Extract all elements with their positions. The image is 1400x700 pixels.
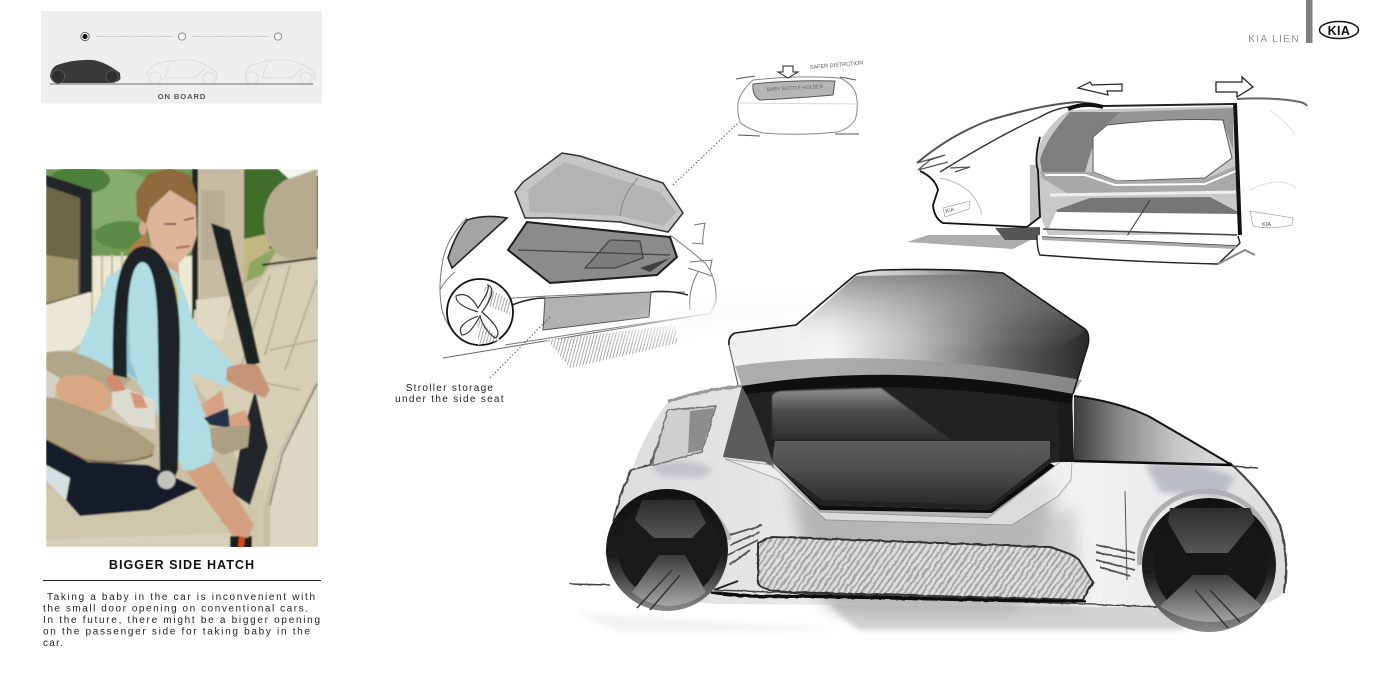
rear window bbox=[652, 406, 716, 465]
rocker storage panel bbox=[758, 537, 1093, 600]
trees bbox=[46, 169, 206, 259]
photo: mother fastening baby carrier on rear seat bbox=[46, 166, 320, 548]
carrier canopy bbox=[46, 398, 155, 462]
text block: hatch description: on the passenger side for taking baby in the bbox=[43, 626, 311, 638]
text block: hatch description bbox=[43, 592, 321, 649]
rear window bbox=[448, 216, 507, 268]
badge sketches: KIA bbox=[945, 207, 955, 215]
sweater bbox=[75, 261, 234, 470]
hands and arm bbox=[187, 461, 254, 538]
ground shading bbox=[547, 325, 678, 368]
logo: KIA oval: KIA bbox=[1328, 24, 1350, 38]
handwritten note: SAFER DISTRCTION bbox=[810, 60, 863, 71]
icon: active car silhouette bbox=[50, 60, 120, 83]
text block: hatch description: Taking a baby in the car is inconvenient with bbox=[47, 592, 316, 603]
pillar bbox=[196, 169, 246, 276]
baby bbox=[46, 370, 60, 398]
sketch: hatch open, rear three-quarter view bbox=[440, 153, 716, 368]
callout line: hatch to console bbox=[673, 123, 738, 185]
car door frame bbox=[46, 175, 92, 305]
side sketch marks bbox=[728, 525, 1135, 576]
sketch: interior rear view mirror / overhead console bbox=[736, 60, 863, 136]
neck bbox=[149, 240, 180, 279]
hair strand bbox=[128, 232, 150, 254]
front wheel bbox=[1140, 491, 1276, 632]
necklace strap bbox=[173, 273, 178, 300]
open hatch panel bbox=[515, 153, 683, 232]
pillar shadow line bbox=[1125, 491, 1127, 580]
hatch shadow on body bbox=[790, 470, 1055, 610]
rear sketch lines bbox=[570, 386, 1286, 610]
hair bbox=[136, 168, 197, 224]
soft background haze bbox=[600, 300, 1000, 340]
bolster bbox=[270, 385, 317, 547]
carrier base bbox=[46, 440, 198, 516]
stage label: ON BOARD bbox=[158, 92, 206, 101]
sketch: interior rear view mirror / overhead console: BABY BOTTLE HOLDER bbox=[767, 84, 824, 93]
wheel bbox=[447, 279, 513, 345]
car body bbox=[609, 385, 1286, 608]
icon: inactive car outline 2 bbox=[147, 60, 217, 84]
sketch: open sliding doors, side view: KIA bbox=[1262, 222, 1271, 228]
ground shadow bbox=[907, 235, 1040, 249]
seat back bbox=[190, 258, 317, 520]
brand header bbox=[1248, 0, 1358, 45]
sliding step bbox=[1037, 235, 1240, 264]
open hatch bbox=[729, 269, 1089, 394]
text block: hatch description: car. bbox=[43, 638, 64, 649]
door pillar bbox=[1235, 103, 1240, 235]
hatch opening bbox=[508, 222, 677, 283]
side glass bbox=[723, 379, 1074, 510]
white lower wall bbox=[1048, 212, 1240, 234]
console outline bbox=[738, 77, 857, 134]
ground shadow bbox=[830, 600, 1185, 630]
arrow: insertion direction bbox=[778, 66, 798, 78]
stage dots and connectors bbox=[81, 32, 282, 41]
panel: journey stage indicator bbox=[41, 11, 322, 104]
seat belt bbox=[211, 223, 260, 366]
callout line: stroller storage bbox=[490, 317, 550, 378]
sketch: main rendered car with hatch open bbox=[570, 269, 1286, 632]
sketch: open sliding doors, side view bbox=[907, 77, 1307, 264]
rear wheel bbox=[606, 489, 729, 611]
fence bbox=[90, 254, 194, 316]
rear roof bbox=[1237, 98, 1307, 106]
interior window bbox=[1093, 120, 1232, 181]
headrest bbox=[264, 169, 317, 258]
annotation: stroller storage bbox=[395, 383, 505, 405]
interior shaded wall bbox=[1037, 106, 1240, 235]
icon: inactive car outline 3 bbox=[245, 60, 315, 84]
model name: KIA LIEN bbox=[1248, 34, 1300, 45]
seat cushion bbox=[46, 490, 264, 547]
heading: bigger side hatch: BIGGER SIDE HATCH bbox=[109, 558, 255, 572]
carrier tan shell bbox=[46, 351, 132, 398]
annotation: stroller storage: Stroller storage bbox=[406, 383, 494, 394]
annotation: stroller storage: under the side seat bbox=[395, 394, 505, 405]
body lines bbox=[440, 218, 716, 358]
face bbox=[146, 190, 197, 264]
storage panel bbox=[543, 292, 651, 330]
badge sketches bbox=[943, 201, 970, 217]
seat bands bbox=[1040, 165, 1238, 195]
arrow: door slides right bbox=[1216, 77, 1253, 97]
front glass bbox=[1074, 397, 1230, 464]
carrier handle bbox=[113, 246, 180, 488]
arrow: door slides left bbox=[1078, 82, 1122, 95]
face features bbox=[164, 218, 194, 224]
text block: hatch description: the small door opening on conventional cars. bbox=[43, 604, 309, 614]
text block: hatch description: In the future, there might be a bigger opening bbox=[43, 615, 321, 626]
body outline bbox=[917, 102, 1103, 163]
